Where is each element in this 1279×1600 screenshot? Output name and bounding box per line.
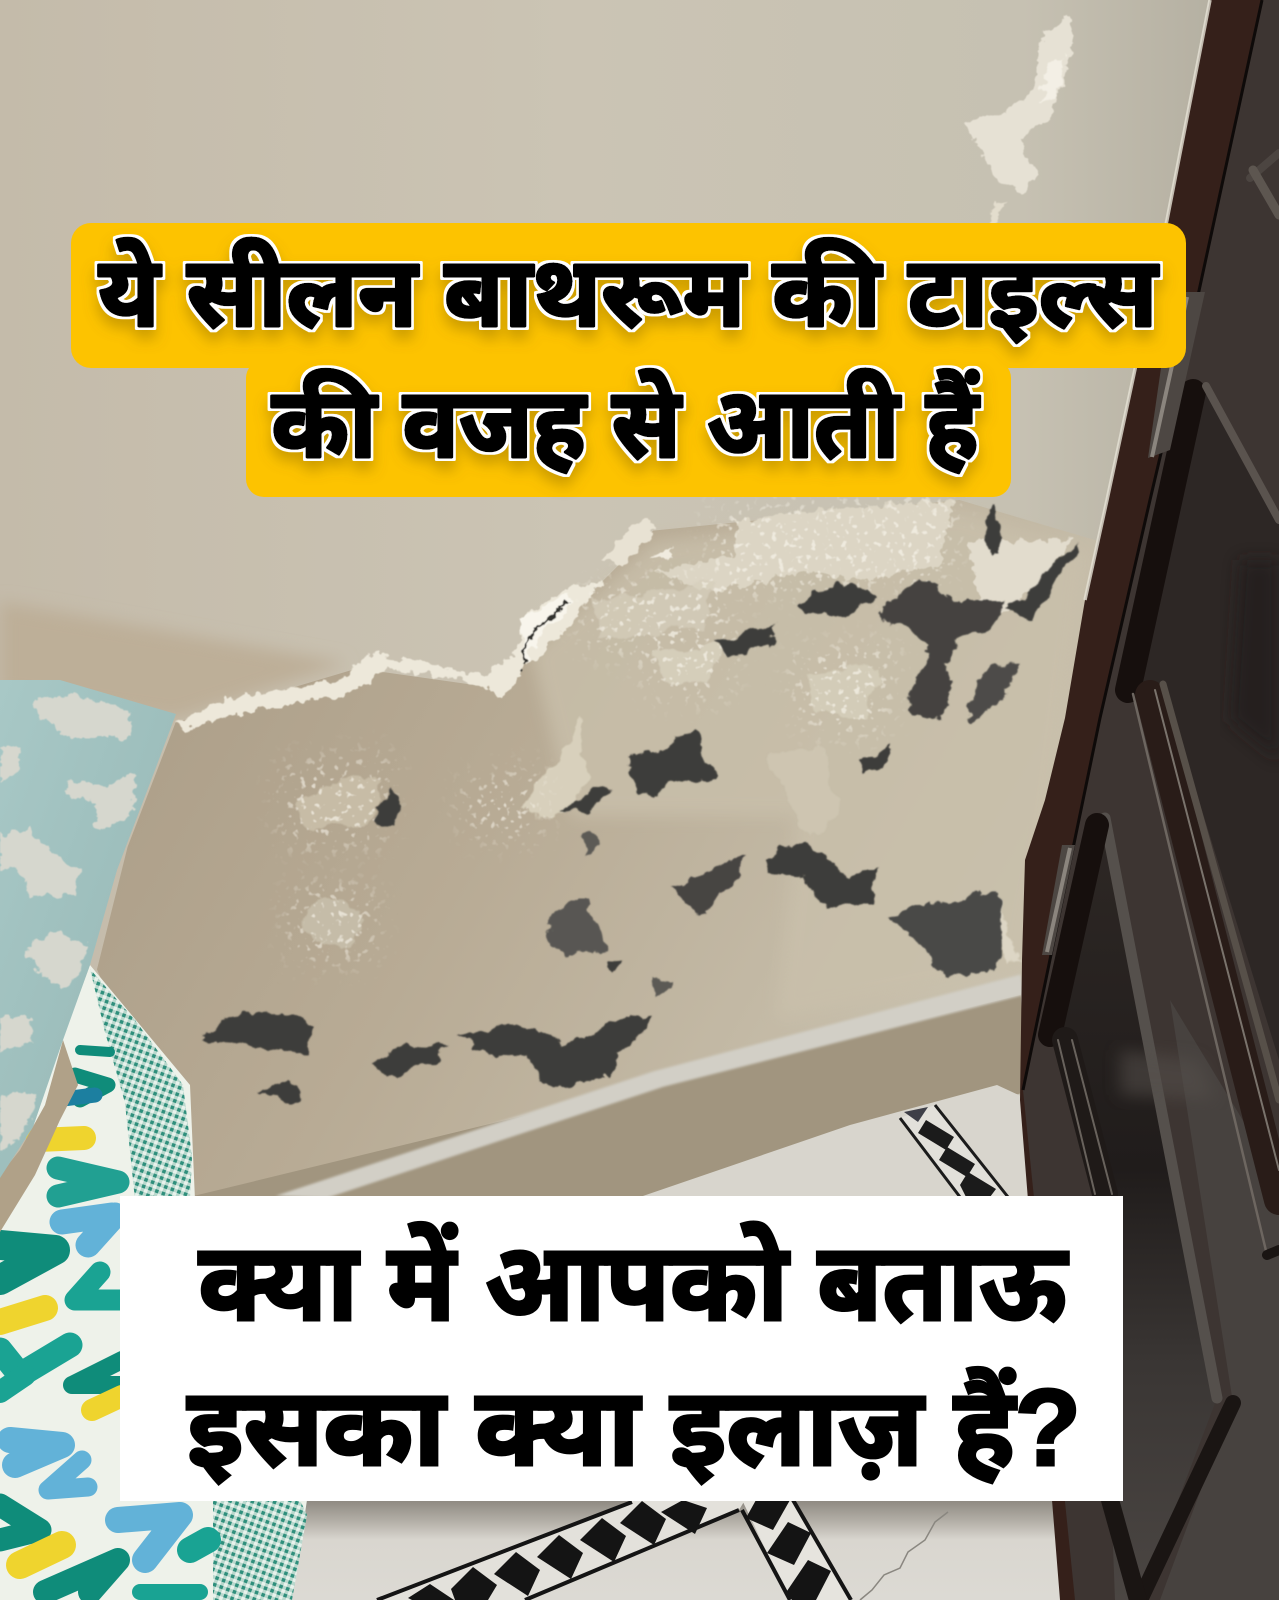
peeling paint edge: [176, 500, 1072, 729]
door hinge upper: [1148, 292, 1205, 458]
top peeling paint: [965, 15, 1074, 222]
wall lower section in scaled coordinates: [0, 15, 1097, 1209]
door frame: [1020, 0, 1279, 1600]
bedsheet: [0, 965, 307, 1600]
lower floor marble: [290, 1500, 1075, 1600]
door lower interior panel: [1057, 816, 1217, 1600]
mould patches: [199, 505, 1077, 1104]
left wall shadow band: [0, 602, 347, 719]
lower floor checker strip 1: [377, 1500, 745, 1600]
flaking paint patches: [296, 582, 1021, 969]
door hinge lower: [1042, 845, 1075, 955]
door leaf: [1023, 0, 1279, 1600]
door lower right surface: [1160, 1000, 1279, 1600]
question line 2: इसका क्या इलाज़ हैं?: [187, 1367, 1081, 1489]
title line 2: की वजह से आती हैं: [272, 368, 980, 478]
skirting white stripe: [276, 974, 1024, 1198]
bedsheet gingham border lower: [213, 1500, 307, 1600]
door upper interior panel: [1137, 383, 1279, 1060]
frame white paint edge: [1085, 0, 1210, 600]
door mouldings: [1050, 153, 1279, 1600]
pillow embroidery: [0, 696, 137, 1150]
skirting board: [194, 995, 1026, 1209]
banner line 1 box: [71, 223, 1186, 368]
white question panel: [120, 1196, 1123, 1501]
bedsheet hearts: [0, 1050, 208, 1592]
yellow title banner: [71, 223, 1186, 497]
banner line 2 box: [246, 360, 1011, 497]
question line 1: क्या में आपको बताऊ: [198, 1222, 1069, 1344]
pillow: [0, 680, 176, 1232]
upper floor checker strip: [900, 1105, 1008, 1197]
frame door gap line: [1023, 0, 1262, 1090]
upper floor marble: [640, 1085, 1032, 1197]
lower floor checker strip 2: [742, 1500, 851, 1600]
title line 1: ये सीलन बाथरूम की टाइल्स: [98, 237, 1159, 347]
pillow underside: [0, 1040, 78, 1232]
door reflection band: [1120, 1050, 1215, 1100]
lighter damp patch: [531, 510, 1087, 1020]
flaky white speckles: [281, 490, 960, 959]
marble crack: [860, 1512, 948, 1600]
damp lower wall: [97, 500, 1097, 1199]
bedsheet gingham border upper: [90, 969, 192, 1200]
door upper shading: [1230, 560, 1279, 760]
title text: [98, 237, 1159, 478]
